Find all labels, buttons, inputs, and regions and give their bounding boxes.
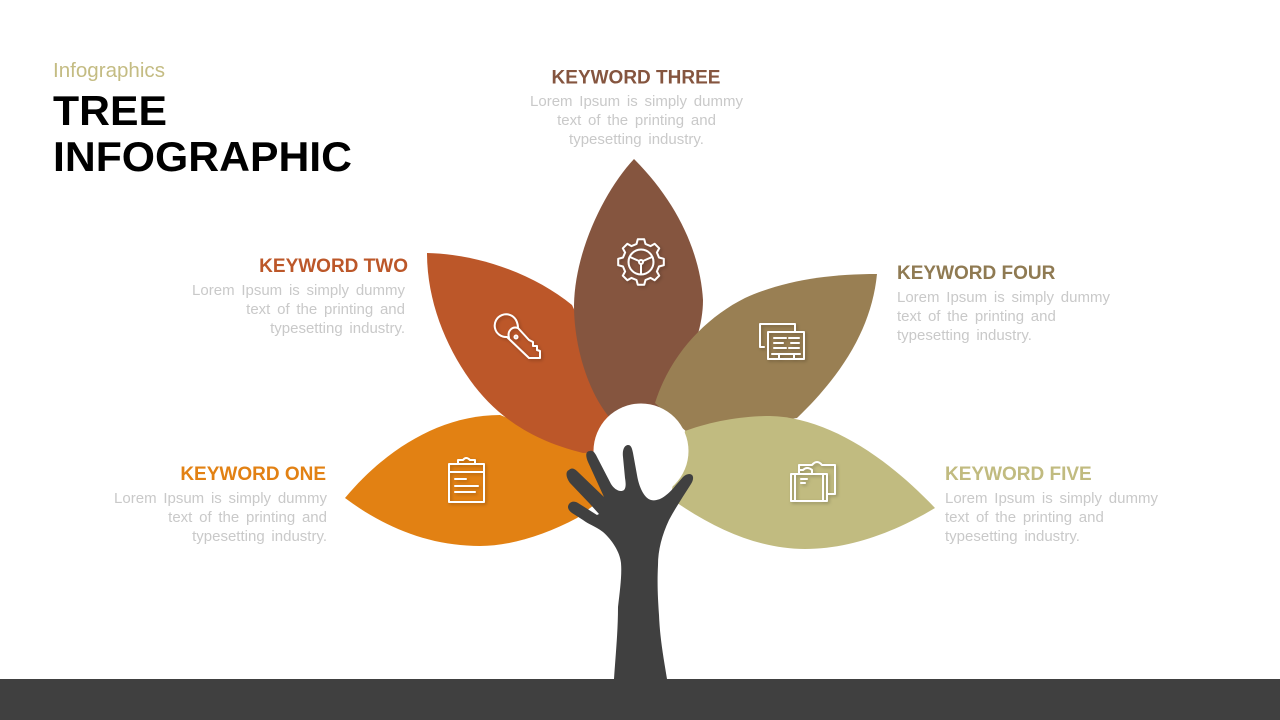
text: keyword five: Lorem Ipsum is simply dummy <box>945 490 1158 507</box>
icon: key <box>495 314 540 358</box>
heading: Infographics title block: TREE <box>53 87 167 134</box>
text: keyword one: KEYWORD ONE <box>180 464 326 485</box>
text: keyword one: text of the printing and <box>168 509 327 526</box>
text: keyword one <box>114 464 327 545</box>
icon: suitcases <box>791 462 835 501</box>
text: keyword three: text of the printing and <box>557 112 716 129</box>
text: keyword five: text of the printing and <box>945 509 1104 526</box>
leaf: keyword three <box>574 159 703 418</box>
leaf: keyword four <box>655 274 877 435</box>
leaf: keyword five <box>670 416 935 549</box>
text: keyword two: KEYWORD TWO <box>259 256 408 277</box>
text: keyword three: typesetting industry. <box>569 131 704 148</box>
leaf: keyword two <box>427 253 640 453</box>
text: keyword four: text of the printing and <box>897 308 1056 325</box>
ground band <box>0 679 1280 720</box>
text: keyword five: KEYWORD FIVE <box>945 464 1092 485</box>
heading: Infographics title block: INFOGRAPHIC <box>53 133 352 180</box>
hand tree trunk <box>566 445 693 679</box>
text: keyword two: text of the printing and <box>246 301 405 318</box>
leaf: keyword one <box>345 415 640 546</box>
heading: Infographics title block: Infographics <box>53 60 165 82</box>
text: keyword four: KEYWORD FOUR <box>897 263 1056 284</box>
text: keyword four: Lorem Ipsum is simply dummy <box>897 289 1110 306</box>
center circle <box>594 404 688 498</box>
icon: clipboard <box>449 458 484 502</box>
heading: Infographics title block <box>53 60 352 180</box>
text: keyword three: KEYWORD THREE <box>552 68 720 88</box>
text: keyword three: Lorem Ipsum is simply dummy <box>530 93 743 110</box>
text: keyword two: typesetting industry. <box>270 320 405 337</box>
icon: gear <box>618 239 664 285</box>
text: keyword three <box>530 68 743 148</box>
text: keyword four <box>897 263 1110 344</box>
text: keyword two <box>192 256 408 337</box>
text: keyword one: typesetting industry. <box>192 528 327 545</box>
icon: documents <box>760 324 804 359</box>
text: keyword two: Lorem Ipsum is simply dummy <box>192 282 405 299</box>
text: keyword one: Lorem Ipsum is simply dummy <box>114 490 327 507</box>
text: keyword five: typesetting industry. <box>945 528 1080 545</box>
text: keyword five <box>945 464 1158 545</box>
text: keyword four: typesetting industry. <box>897 327 1032 344</box>
